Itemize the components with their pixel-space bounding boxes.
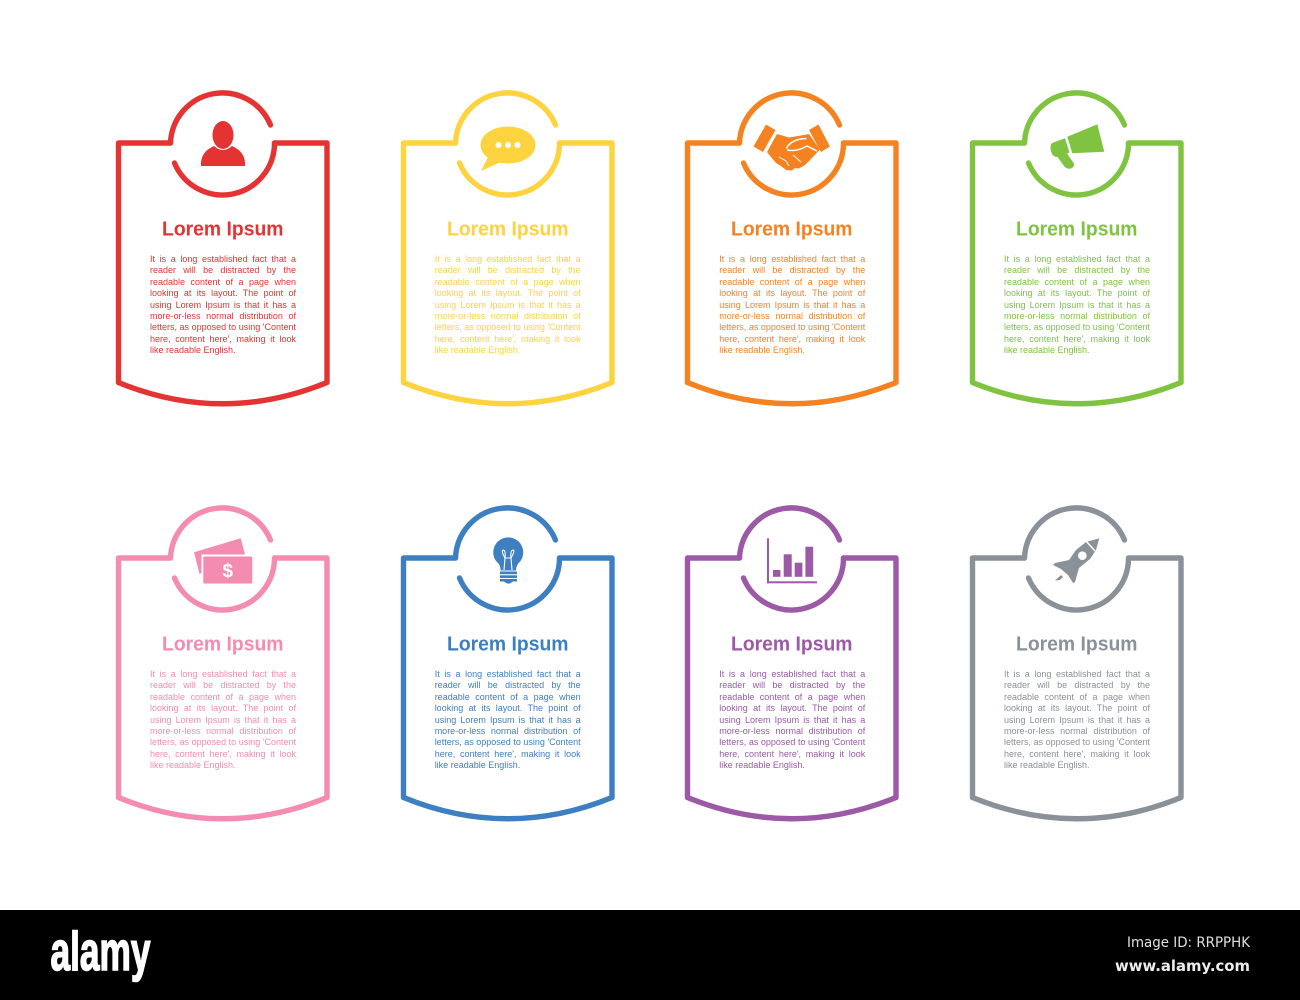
heading: Lorem Ipsum — [731, 634, 853, 656]
text block: here, content here', making it look — [719, 749, 865, 759]
text block: like readable English. — [435, 345, 520, 355]
icon: handshake — [754, 124, 830, 170]
text block: letters, as opposed to using 'Content — [435, 322, 581, 332]
text block — [435, 254, 581, 355]
text block: here, content here', making it look — [1004, 749, 1150, 759]
text block — [719, 669, 866, 770]
text block: reader will be distracted by the — [1004, 265, 1150, 275]
heading: Lorem Ipsum — [447, 634, 568, 656]
text block: readable content of a page when — [150, 692, 296, 702]
text block: letters, as opposed to using 'Content — [1004, 322, 1150, 332]
card: blue light bulb — [400, 505, 615, 822]
icon: speech bubble — [480, 126, 535, 171]
icon: rocket — [1053, 538, 1099, 583]
frame — [403, 508, 612, 819]
frame — [688, 508, 896, 819]
card: green megaphone — [970, 90, 1184, 406]
card: gray rocket — [970, 505, 1184, 822]
heading: Lorem Ipsum — [1016, 218, 1138, 240]
text block: like readable English. — [150, 345, 236, 355]
text block: It is a long established fact that a — [719, 254, 865, 264]
text block: using Lorem Ipsum is that it has a — [1004, 300, 1150, 310]
text block: readable content of a page when — [1004, 277, 1150, 287]
text block: looking at its layout. The point of — [150, 703, 296, 713]
text block: reader will be distracted by the — [435, 265, 581, 275]
text block: It is a long established fact that a — [435, 254, 581, 264]
text block: more-or-less normal distribution of — [150, 311, 296, 321]
card: yellow speech bubble — [400, 90, 615, 406]
text block: here, content here', making it look — [435, 334, 581, 344]
text block: reader will be distracted by the — [150, 265, 296, 275]
icon: bar chart — [767, 538, 817, 583]
text block: letters, as opposed to using 'Content — [435, 737, 581, 747]
text block: readable content of a page when — [150, 277, 296, 287]
text block — [1004, 669, 1150, 770]
text block: It is a long established fact that a — [1004, 669, 1150, 679]
text block: here, content here', making it look — [719, 334, 865, 344]
text block: like readable English. — [435, 760, 520, 770]
text block: more-or-less normal distribution of — [435, 311, 581, 321]
icon: light bulb — [493, 537, 523, 584]
text block: looking at its layout. The point of — [1004, 703, 1150, 713]
text block: reader will be distracted by the — [435, 680, 581, 690]
text block: more-or-less normal distribution of — [719, 726, 865, 736]
footer bar — [0, 910, 1300, 1000]
text block: like readable English. — [150, 760, 236, 770]
text block: here, content here', making it look — [435, 749, 581, 759]
text block: more-or-less normal distribution of — [1004, 311, 1150, 321]
icon: banknotes — [194, 538, 252, 584]
text block: using Lorem Ipsum is that it has a — [1004, 714, 1150, 724]
text block: like readable English. — [719, 345, 805, 355]
text block: more-or-less normal distribution of — [719, 311, 865, 321]
text block: here, content here', making it look — [150, 334, 296, 344]
text block: reader will be distracted by the — [150, 680, 296, 690]
text block: looking at its layout. The point of — [719, 703, 865, 713]
text block: looking at its layout. The point of — [150, 288, 296, 298]
frame — [118, 93, 327, 404]
heading: Lorem Ipsum — [731, 218, 853, 240]
icon: person — [201, 121, 245, 166]
text block: looking at its layout. The point of — [719, 288, 865, 298]
text block: letters, as opposed to using 'Content — [719, 322, 865, 332]
text block: readable content of a page when — [719, 277, 865, 287]
website: www.alamy.com — [1115, 957, 1250, 975]
text block: like readable English. — [719, 760, 805, 770]
text block — [1004, 254, 1150, 355]
card: orange handshake — [684, 90, 899, 406]
text block: looking at its layout. The point of — [1004, 288, 1150, 298]
heading: Lorem Ipsum — [162, 218, 284, 240]
text block: letters, as opposed to using 'Content — [150, 322, 296, 332]
text block: It is a long established fact that a — [150, 669, 296, 679]
text block: using Lorem Ipsum is that it has a — [435, 714, 581, 724]
text block: using Lorem Ipsum is that it has a — [150, 300, 296, 310]
icon: megaphone — [1050, 124, 1104, 169]
text block: more-or-less normal distribution of — [150, 726, 296, 736]
heading: Lorem Ipsum — [447, 218, 568, 240]
card: pink money — [116, 505, 330, 822]
text block: readable content of a page when — [435, 692, 581, 702]
text block: readable content of a page when — [435, 277, 581, 287]
text block — [435, 669, 581, 770]
text block: reader will be distracted by the — [719, 680, 865, 690]
text block: reader will be distracted by the — [719, 265, 865, 275]
text block — [150, 669, 296, 770]
text block — [150, 254, 296, 355]
text block: using Lorem Ipsum is that it has a — [150, 714, 296, 724]
text block: more-or-less normal distribution of — [1004, 726, 1150, 736]
text block: more-or-less normal distribution of — [435, 726, 581, 736]
icon: banknotes: $ — [223, 561, 234, 582]
heading: Lorem Ipsum — [162, 634, 284, 656]
text block: looking at its layout. The point of — [435, 288, 581, 298]
card: purple bar chart — [684, 505, 899, 822]
frame — [972, 508, 1181, 819]
text block: using Lorem Ipsum is that it has a — [719, 714, 865, 724]
text block: looking at its layout. The point of — [435, 703, 581, 713]
text block — [719, 254, 866, 355]
frame — [118, 508, 327, 819]
text block: like readable English. — [1004, 760, 1090, 770]
text block: letters, as opposed to using 'Content — [150, 737, 296, 747]
text block: readable content of a page when — [1004, 692, 1150, 702]
text block: It is a long established fact that a — [1004, 254, 1150, 264]
text block: It is a long established fact that a — [719, 669, 865, 679]
frame — [403, 93, 612, 404]
image id: Image ID: RRPPHK — [1127, 935, 1250, 951]
text block: readable content of a page when — [719, 692, 865, 702]
text block: using Lorem Ipsum is that it has a — [719, 300, 865, 310]
card: red person — [116, 90, 330, 406]
logo: alamy: alamy — [50, 920, 151, 982]
text block: like readable English. — [1004, 345, 1090, 355]
text block: It is a long established fact that a — [150, 254, 296, 264]
heading: Lorem Ipsum — [1016, 634, 1138, 656]
text block: letters, as opposed to using 'Content — [1004, 737, 1150, 747]
text block: using Lorem Ipsum is that it has a — [435, 300, 581, 310]
text block: reader will be distracted by the — [1004, 680, 1150, 690]
text block: letters, as opposed to using 'Content — [719, 737, 865, 747]
text block: here, content here', making it look — [150, 749, 296, 759]
frame — [972, 93, 1181, 404]
text block: here, content here', making it look — [1004, 334, 1150, 344]
text block: It is a long established fact that a — [435, 669, 581, 679]
frame — [688, 93, 896, 404]
